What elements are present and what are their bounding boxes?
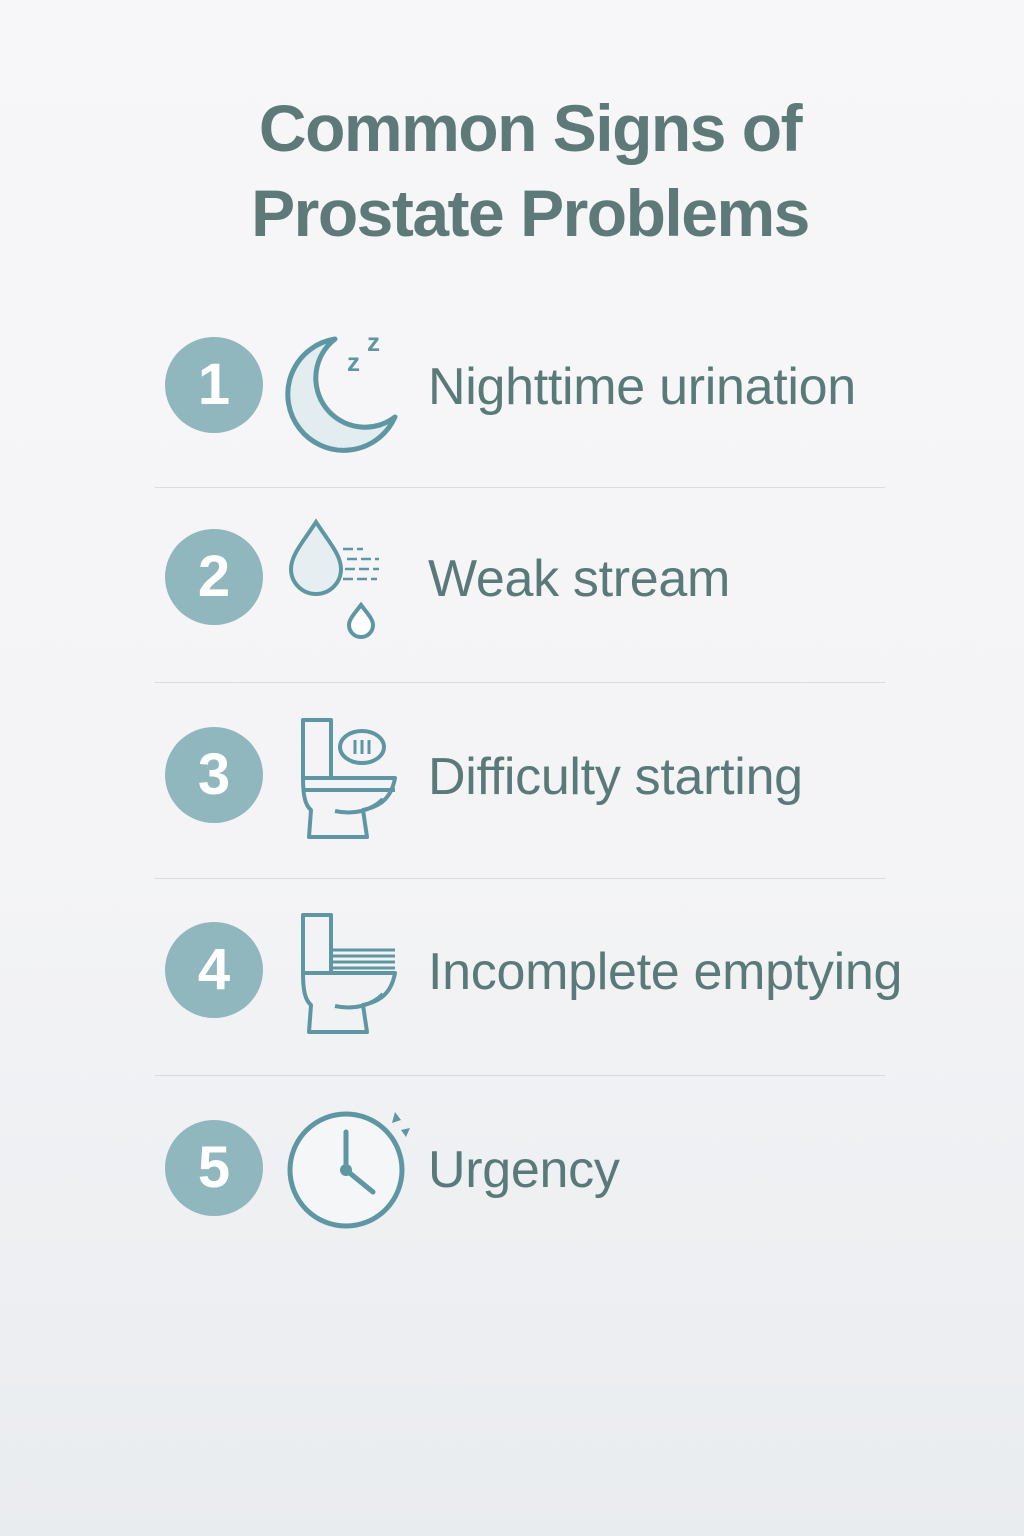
row 2: weak stream [165, 518, 730, 639]
number 5: 5 [198, 1135, 230, 1200]
label: Incomplete emptying [428, 943, 902, 1001]
icon: moon: z [367, 327, 380, 357]
number 2: 2 [198, 544, 230, 609]
number 3 [165, 727, 263, 823]
row 3: difficulty starting [165, 718, 803, 839]
title [251, 91, 809, 250]
icon: toilet lid lines [301, 913, 397, 1034]
number 5 [165, 1120, 263, 1216]
number 3: 3 [198, 742, 230, 807]
number 1 [165, 337, 263, 433]
row 4: incomplete emptying [165, 913, 902, 1034]
number 1: 1 [198, 352, 230, 417]
title: Prostate Problems [251, 176, 809, 250]
label: Urgency [428, 1141, 620, 1199]
icon: moon [285, 327, 398, 453]
title: Common Signs of [259, 91, 801, 165]
icon: moon: z [347, 347, 360, 377]
icon: clock [288, 1112, 410, 1228]
number 4 [165, 922, 263, 1018]
label: Difficulty starting [428, 748, 803, 806]
icon: toilet with meter [301, 718, 397, 839]
icon: drops [289, 518, 379, 639]
label: Nighttime urination [428, 358, 856, 416]
row 1: nighttime urination [165, 327, 856, 453]
number 4: 4 [198, 937, 230, 1002]
number 2 [165, 529, 263, 625]
row 5: urgency [165, 1112, 620, 1228]
label: Weak stream [428, 550, 730, 608]
